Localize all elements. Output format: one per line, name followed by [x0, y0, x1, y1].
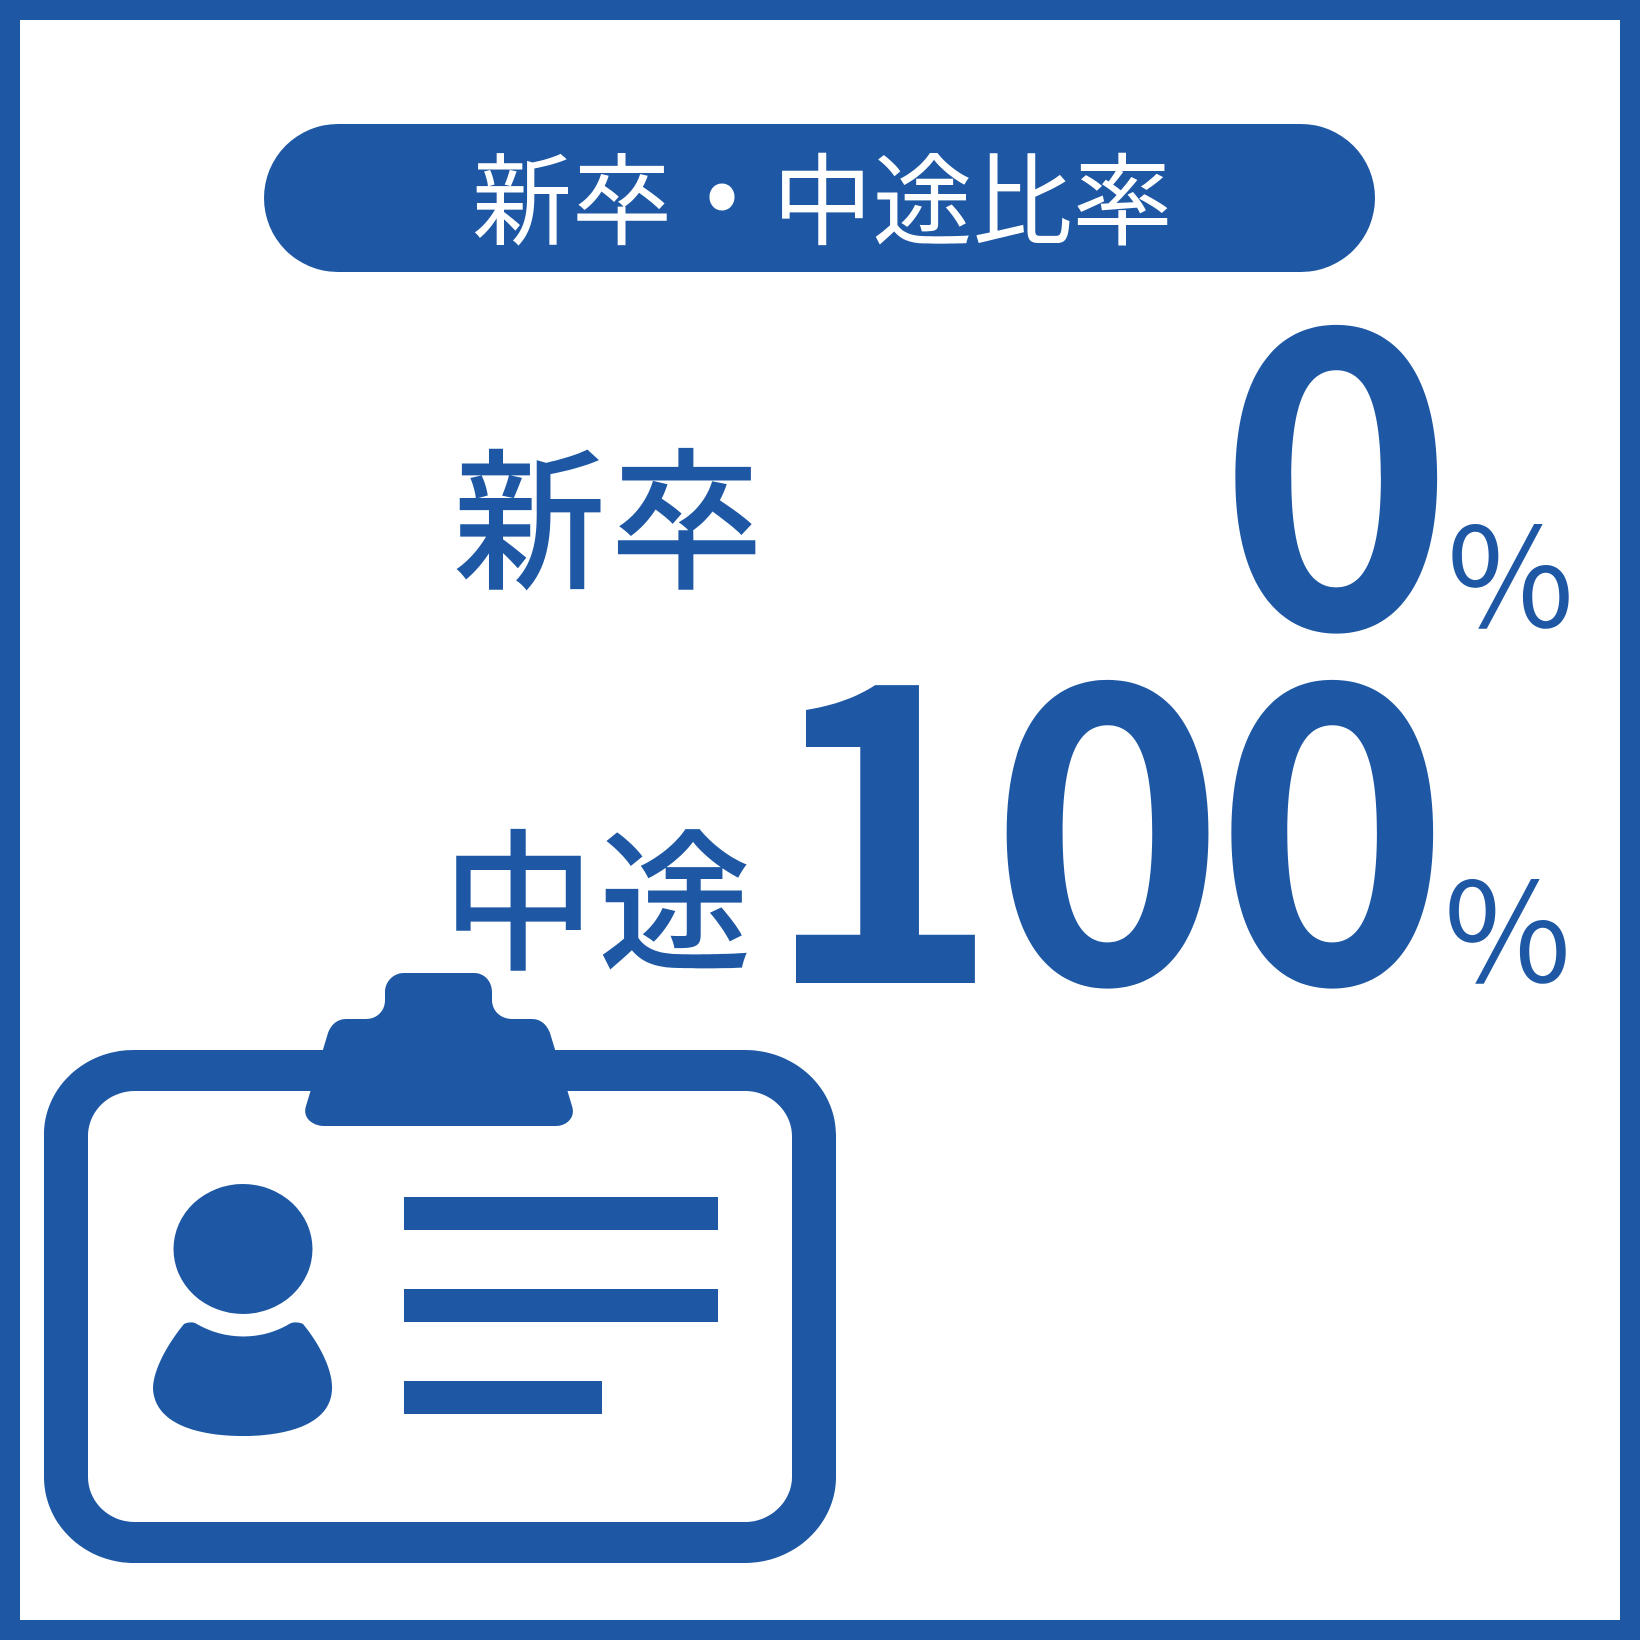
value: new graduates 0% — [1218, 162, 1574, 744]
value: new graduates 0%: % — [1447, 467, 1574, 667]
icon: ID card — [44, 973, 836, 1563]
person head — [174, 1184, 312, 1314]
value: mid-career 100%: % — [1444, 822, 1571, 1022]
title pill — [264, 110, 1375, 272]
value: new graduates 0%: 0 — [1218, 162, 1455, 744]
title text: 新卒・中途比率 — [472, 110, 1172, 266]
label: mid-career: 中途 — [442, 782, 755, 1003]
value: mid-career 100%: 100 — [763, 517, 1451, 1099]
label: new graduates: 新卒 — [453, 401, 767, 622]
clip — [305, 973, 573, 1126]
text line 1 — [404, 1197, 718, 1230]
text line 2 — [404, 1289, 718, 1322]
person body — [153, 1322, 332, 1436]
card frame — [44, 1050, 836, 1563]
text line 3 — [404, 1381, 602, 1414]
